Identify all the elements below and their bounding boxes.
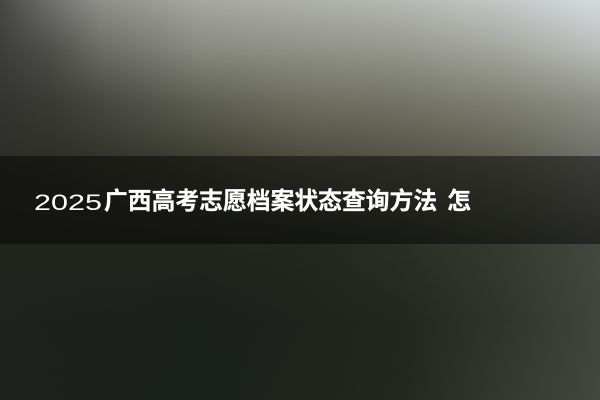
- title: 广西高考志愿档案状态查询方法 怎: [104, 188, 471, 215]
- dark title band: [0, 156, 600, 244]
- title: 2025: [34, 190, 102, 215]
